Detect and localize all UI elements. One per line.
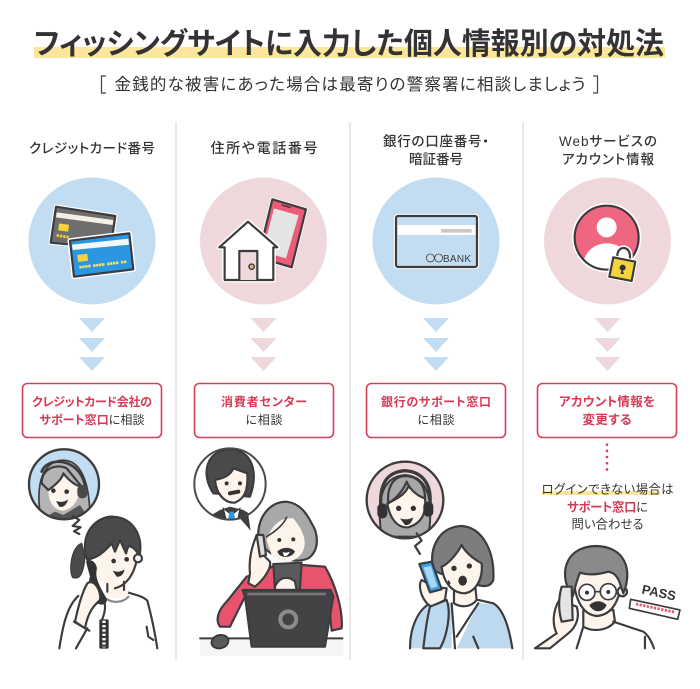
- avatar: operator: [29, 449, 99, 534]
- arrows: [423, 318, 449, 371]
- icon: bank card: [372, 178, 500, 304]
- callout: [538, 384, 676, 438]
- panel: credit card number: [22, 141, 162, 649]
- arrows: [594, 318, 620, 371]
- subtitle: 金銭的な被害にあった場合は最寄りの警察署に相談しましょう: [114, 75, 586, 94]
- callout: [366, 384, 506, 438]
- label: PASS: PASS: [641, 582, 678, 604]
- heading: web service account info: アカウント情報: [562, 152, 654, 167]
- callout: 変更する: [582, 412, 632, 427]
- note: login failure: サポート窓口に: [567, 500, 648, 514]
- note: login failure: 問い合わせる: [572, 518, 644, 532]
- avatar: operator: [194, 448, 266, 531]
- heading: bank account number and PIN: [383, 134, 489, 167]
- illustration: woman on phone: [29, 449, 157, 649]
- note: login failure: [542, 482, 674, 532]
- callout: に相談: [418, 413, 454, 427]
- heading: bank account number and PIN: 暗証番号: [409, 152, 463, 167]
- woman: [218, 502, 342, 647]
- icon: account with padlock: [544, 178, 671, 304]
- panel: web service account info: [535, 134, 680, 648]
- callout: [22, 384, 162, 438]
- avatar: operator: [367, 462, 443, 554]
- desk: [199, 638, 343, 656]
- mouse: [210, 633, 230, 650]
- heading: web service account info: Webサービスの: [559, 134, 657, 149]
- woman: [410, 526, 512, 648]
- callout: アカウント情報を: [559, 394, 655, 409]
- icon: credit cards: [28, 178, 156, 304]
- heading: credit card number: クレジットカード番号: [29, 141, 155, 156]
- heading: bank account number and PIN: 銀行の口座番号・: [383, 134, 489, 149]
- heading: address and phone number: 住所や電話番号: [210, 140, 318, 156]
- callout: 消費者センター: [221, 394, 307, 409]
- panel: address and phone number: [194, 140, 343, 656]
- illustration: woman with smartphone: [367, 462, 512, 648]
- icon: bank card: BANK: [443, 254, 471, 265]
- arrows: [79, 318, 105, 371]
- panel: bank account number and PIN: [366, 134, 512, 648]
- callout: クレジットカード会社の: [32, 394, 152, 409]
- woman: [59, 517, 157, 649]
- arrows: [250, 318, 276, 371]
- heading: web service account info: [559, 134, 657, 167]
- illustration: older woman at laptop: [194, 448, 343, 656]
- callout: 銀行のサポート窓口: [381, 394, 491, 409]
- callout: に相談: [246, 413, 282, 427]
- illustration: man with phone and password: [535, 546, 680, 648]
- note: login failure: ログインできない場合は: [542, 482, 674, 496]
- title: フィッシングサイトに入力した個人情報別の対処法: [34, 28, 664, 61]
- dotted connector: [606, 444, 608, 473]
- callout: [194, 384, 334, 438]
- icon: house and smartphone: [200, 178, 327, 304]
- callout: サポート窓口に相談: [39, 412, 144, 427]
